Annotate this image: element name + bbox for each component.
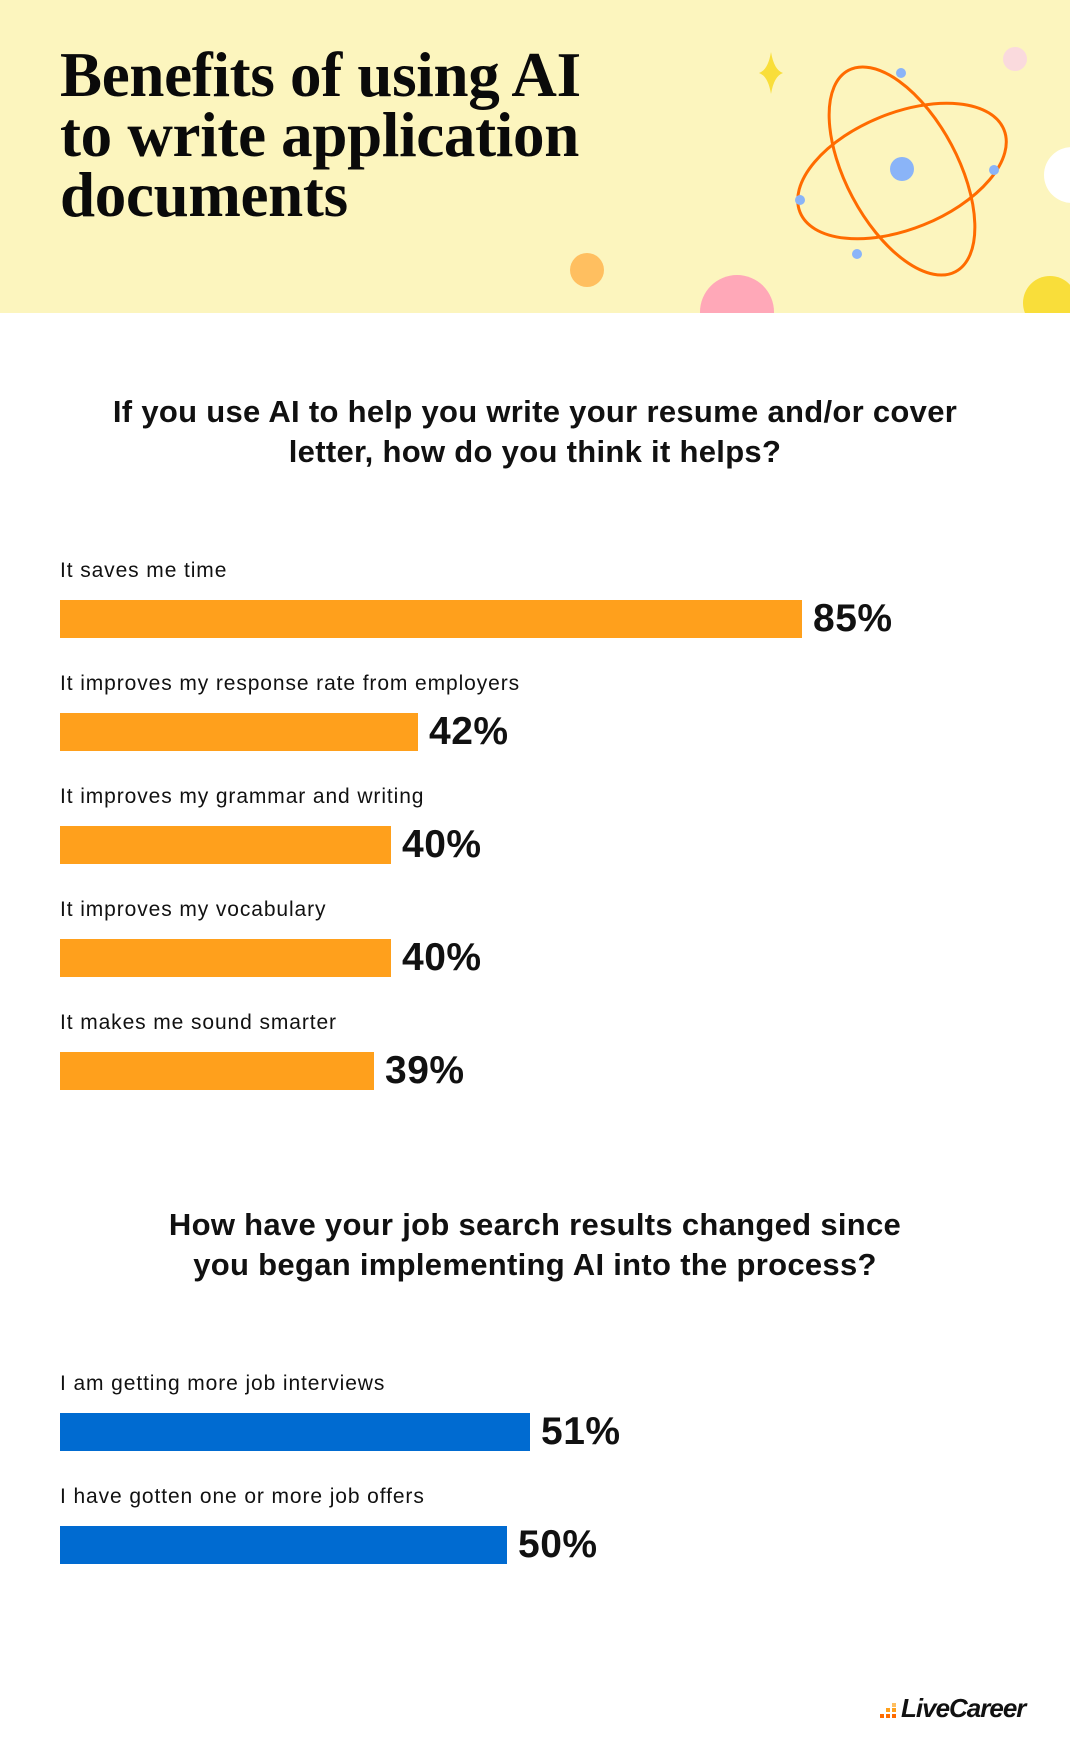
row: response rate xyxy=(60,672,520,753)
question 1 heading: letter, how do you think it helps? xyxy=(289,434,781,469)
row: smarter xyxy=(60,1011,465,1092)
row: grammar xyxy=(60,785,482,866)
row: vocabulary: 40% xyxy=(402,936,482,979)
row: response rate: It improves my response rate from employers xyxy=(60,672,520,695)
row: interviews xyxy=(60,1372,621,1453)
row: smarter: 39% xyxy=(385,1049,465,1092)
icon: atom xyxy=(778,44,1026,298)
row: interviews: 51% xyxy=(541,1410,621,1453)
question 2 heading xyxy=(169,1207,901,1282)
row: grammar: 40% xyxy=(402,823,482,866)
row: saves time: It saves me time xyxy=(60,559,227,582)
row: offers: I have gotten one or more job offers xyxy=(60,1485,425,1508)
question 2 heading: How have your job search results changed since xyxy=(169,1207,901,1242)
row: saves time: 85% xyxy=(813,597,893,640)
row: vocabulary: It improves my vocabulary xyxy=(60,898,326,921)
question 1 heading: If you use AI to help you write your resume and/or cover xyxy=(113,394,957,429)
row: smarter: It makes me sound smarter xyxy=(60,1011,337,1034)
row: offers xyxy=(60,1485,598,1566)
row: offers: 50% xyxy=(518,1523,598,1566)
decorative atom illustration xyxy=(570,47,1070,313)
question 1 heading xyxy=(113,394,957,469)
title xyxy=(60,40,581,230)
chart: AI benefits xyxy=(60,559,893,1092)
row: saves time xyxy=(60,559,893,640)
row: grammar: It improves my grammar and writing xyxy=(60,785,424,808)
row: response rate: 42% xyxy=(429,710,509,753)
question 2 heading: you began implementing AI into the process? xyxy=(193,1247,877,1282)
title: documents xyxy=(60,160,348,230)
logo: LiveCareer: LiveCareer xyxy=(901,1693,1025,1723)
icon: logo dots xyxy=(880,1703,896,1718)
title: to write application xyxy=(60,100,579,170)
chart: job search results xyxy=(60,1372,621,1566)
icon: sparkle star xyxy=(759,52,783,94)
row: vocabulary xyxy=(60,898,482,979)
header banner xyxy=(0,0,1070,313)
row: interviews: I am getting more job interviews xyxy=(60,1372,385,1395)
title: Benefits of using AI xyxy=(60,40,581,110)
icon: bubbles xyxy=(570,47,1070,349)
